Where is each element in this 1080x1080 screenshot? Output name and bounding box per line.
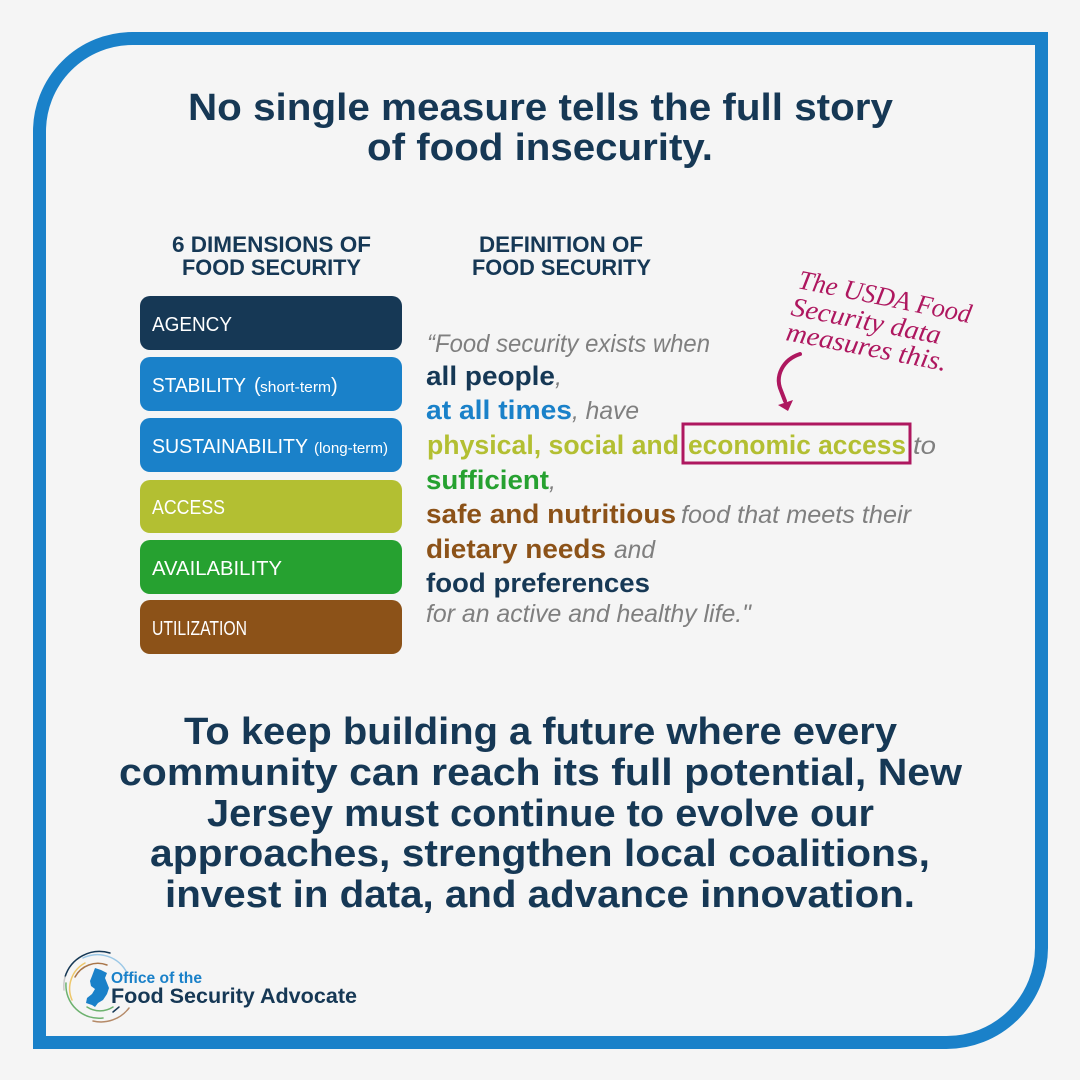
text block: food security definition: economic access (688, 430, 906, 460)
title: No single measure tells the full story (188, 87, 893, 129)
dimension: agency: AGENCY (152, 314, 232, 336)
dimension: sustainability: SUSTAINABILITY (152, 436, 308, 458)
dimension: stability: ) (331, 375, 338, 397)
text block: food security definition: at all times (426, 395, 572, 425)
text block: food security definition: physical, social and (427, 430, 679, 460)
closing statement: invest in data, and advance innovation. (165, 874, 915, 916)
closing statement: To keep building a future where every (184, 711, 897, 753)
text block: food security definition: to (913, 432, 936, 460)
dimension: utilization: UTILIZATION (152, 618, 247, 640)
text block: food security definition: and (614, 536, 656, 564)
callout: USDA handwritten note: Security data (789, 291, 944, 350)
text block: food security definition: , have (572, 397, 639, 425)
heading: definition of food security: DEFINITION OF (479, 232, 643, 257)
callout: USDA handwritten note: measures this. (784, 316, 950, 377)
text block: food security definition: , (555, 363, 562, 391)
callout: USDA handwritten note (784, 264, 975, 377)
logo: Office of the Food Security Advocate (64, 951, 357, 1022)
heading: definition of food security (472, 232, 651, 280)
logo: Office of the Food Security Advocate: Office of the (111, 970, 202, 987)
title: of food insecurity. (367, 127, 713, 169)
dimension: stability: ( (254, 375, 261, 397)
arrow: note to economic access (778, 354, 800, 411)
text block: food security definition: safe and nutritious (426, 499, 676, 529)
panel: six dimensions list (140, 296, 402, 654)
dimension: availability: AVAILABILITY (152, 558, 282, 580)
text block: food security definition: sufficient (426, 465, 549, 495)
dimension: agency (140, 296, 402, 350)
heading: 6 dimensions of food security (172, 232, 371, 280)
dimension: sustainability: (long-term) (314, 441, 388, 457)
text block: food security definition: food preferences (426, 568, 650, 598)
text block: food security definition (426, 330, 936, 628)
text block: food security definition: for an active and healthy life." (426, 600, 752, 628)
dimension: stability: STABILITY (152, 375, 246, 397)
dimension: stability: short-term (260, 380, 331, 396)
text block: food security definition: “Food security exists when (427, 330, 710, 358)
title (188, 87, 893, 169)
icon: logo rings (64, 951, 129, 1022)
dimension: access (140, 480, 402, 533)
callout: USDA handwritten note: The USDA Food (796, 264, 975, 329)
closing statement: Jersey must continue to evolve our (207, 793, 874, 835)
dimension: access: ACCESS (152, 497, 225, 519)
closing statement: approaches, strengthen local coalitions, (150, 833, 930, 875)
heading: definition of food security: FOOD SECURITY (472, 255, 651, 280)
icon: New Jersey silhouette (86, 968, 109, 1007)
text block: food security definition: all people (426, 361, 555, 391)
closing statement: community can reach its full potential, New (119, 752, 962, 794)
dimension: stability (140, 357, 402, 411)
dimension: sustainability (140, 418, 402, 472)
text block: food security definition: , (549, 467, 556, 495)
logo: Office of the Food Security Advocate: Food Security Advocate (111, 985, 357, 1008)
dimension: availability (140, 540, 402, 594)
text block: food security definition: dietary needs (426, 534, 606, 564)
callout: highlight box around economic access (683, 424, 910, 463)
closing statement (119, 711, 962, 916)
heading: 6 dimensions of food security: 6 DIMENSIONS OF (172, 232, 371, 257)
dimension: utilization (140, 600, 402, 654)
heading: 6 dimensions of food security: FOOD SECURITY (182, 255, 361, 280)
text block: food security definition: food that meets their (681, 501, 913, 529)
